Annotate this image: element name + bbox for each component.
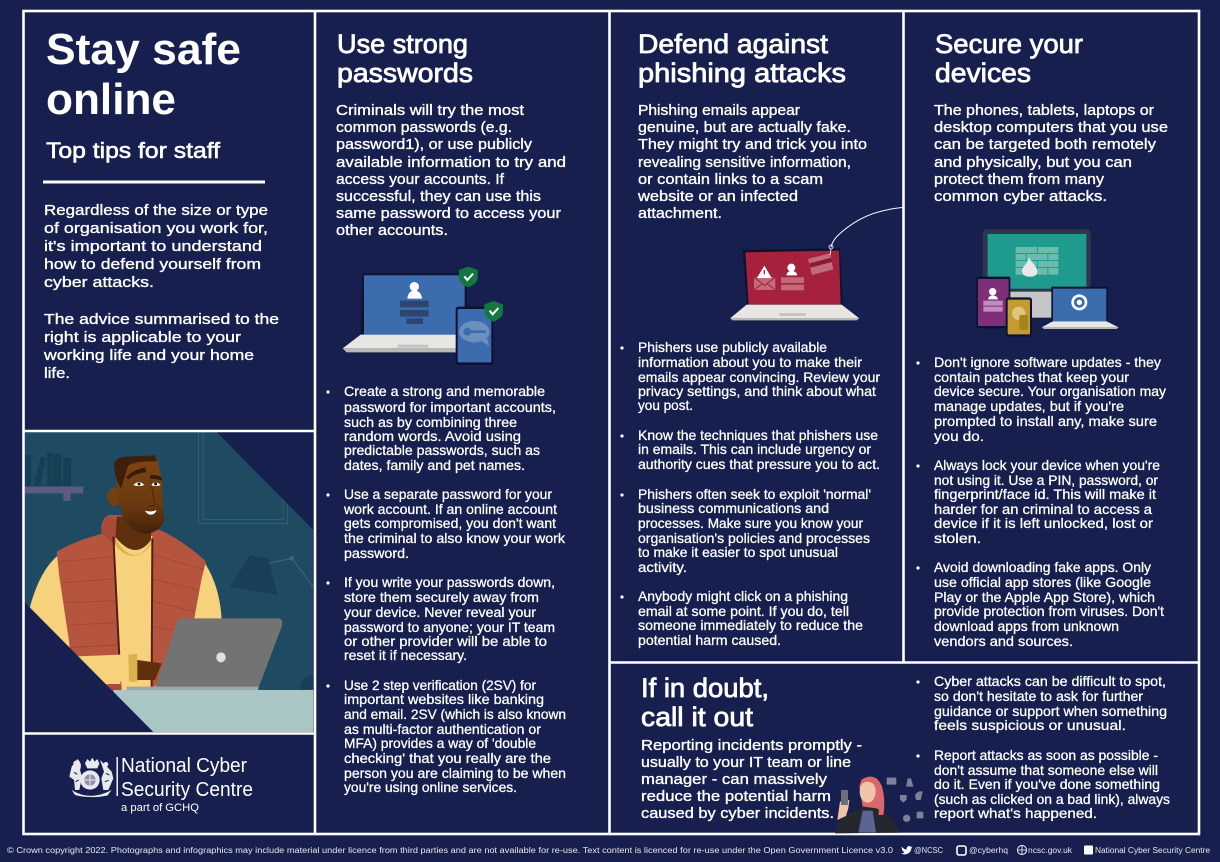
panel: secure your devices xyxy=(916,29,1168,649)
intro text: protect them from many xyxy=(934,171,1105,188)
bullet: tell someone immediately xyxy=(620,589,863,648)
bullet: lock your device: fingerprint/face id. This will make it xyxy=(934,487,1156,502)
bullet: writing passwords down: store them securely away from xyxy=(344,590,539,605)
intro text: website or an infected xyxy=(637,188,798,205)
bullet: public information: you post. xyxy=(638,398,693,413)
bullet list: phishing tips xyxy=(620,340,880,648)
bullet: tell someone immediately: potential harm caused. xyxy=(638,633,781,648)
bullet: writing passwords down: or other provider will be able to xyxy=(344,634,547,649)
bullet: normal business communications: organisation's policies and processes xyxy=(638,531,870,546)
title: Stay safe xyxy=(46,25,241,74)
bullet: writing passwords down xyxy=(326,575,555,663)
bullet: strong password: dates, family and pet names. xyxy=(344,458,525,473)
heading xyxy=(337,29,473,88)
bullet: normal business communications: to make it easier to spot unusual xyxy=(638,545,838,560)
bullet: strong password: Create a strong and memorable xyxy=(344,384,545,399)
reporting text: manager - can massively xyxy=(641,771,828,788)
bullet: writing passwords down: password to anyone; your IT team xyxy=(344,620,555,635)
bullet: lock your device: Always lock your device when you're xyxy=(934,458,1160,473)
website: ncsc.gov.uk xyxy=(1028,846,1073,855)
bullet: software updates: prompted to install any, make sure xyxy=(934,414,1157,429)
icon: woman holding phone with security icons xyxy=(835,777,923,833)
bullet: lock your device xyxy=(916,458,1160,546)
bullet: software updates: contain patches that keep your xyxy=(934,370,1129,385)
intro text xyxy=(934,102,1168,205)
heading xyxy=(641,673,769,732)
heading: Secure your xyxy=(935,29,1083,59)
intro text: or contain links to a scam xyxy=(638,171,823,188)
intro text: access your accounts. If xyxy=(336,171,505,188)
bullet: ask for guidance: Cyber attacks can be difficult to spot, xyxy=(934,674,1166,689)
bullet: two step verification: as multi-factor authentication or xyxy=(344,722,541,737)
heading: phishing attacks xyxy=(638,58,846,88)
logo: National Cyber Security Centre xyxy=(69,755,253,814)
bullet: public information: Phishers use publicly available xyxy=(638,340,827,355)
social: twitter xyxy=(901,846,943,855)
intro text: right is applicable to your xyxy=(44,329,241,346)
title xyxy=(46,25,241,124)
intro text: cyber attacks. xyxy=(44,274,154,291)
intro text: The advice summarised to the xyxy=(44,311,279,328)
intro text: working life and your home xyxy=(43,347,254,364)
intro text: can be targeted both remotely xyxy=(934,136,1157,153)
bullet: fake apps: download apps from unknown xyxy=(934,619,1119,634)
panel: if in doubt, call it out xyxy=(641,673,1170,833)
bullet: software updates xyxy=(916,355,1166,444)
bullet: ask for guidance: feels suspicious or unusual. xyxy=(934,718,1126,733)
bullet: software updates: device secure. Your organisation may xyxy=(934,384,1166,399)
intro text: attachment. xyxy=(638,205,722,222)
bullet: separate password: the criminal to also know your work xyxy=(344,531,565,546)
reporting text xyxy=(641,737,862,822)
copyright notice: © Crown copyright 2022. Photographs and infographics may include material under licence from third parties and are not available for re-use. Text content is licenced for re-use under the Open Government Licence v3.0 xyxy=(7,846,894,855)
title: online xyxy=(46,75,176,124)
heading: Use strong xyxy=(337,29,468,59)
bullet: report attacks: Report attacks as soon as possible - xyxy=(934,748,1158,763)
bullet: lock your device: stolen. xyxy=(934,531,981,546)
bullet: two step verification: important websites like banking xyxy=(344,692,544,707)
intro text xyxy=(43,202,279,382)
bullet: separate password: password. xyxy=(344,546,409,561)
footer xyxy=(7,846,1211,855)
bullet: writing passwords down: reset it if necessary. xyxy=(344,648,467,663)
panel: illustration of man at laptop xyxy=(25,432,313,732)
heading xyxy=(935,29,1083,88)
intro text: life. xyxy=(44,365,70,382)
bullet: strong password: predictable passwords, such as xyxy=(344,443,540,458)
logo wordmark: National Cyber xyxy=(121,755,247,777)
bullet: fake apps: vendors and sources. xyxy=(934,634,1073,649)
bullet: strong password xyxy=(326,384,556,473)
icon: royal crest xyxy=(69,758,113,797)
intro text: password1), or use publicly xyxy=(336,136,533,153)
bullet: strong password: random words. Avoid using xyxy=(344,429,521,444)
subtitle: Top tips for staff xyxy=(46,138,221,163)
icon: laptop and phone with shields xyxy=(343,267,503,365)
intro text: of organisation you work for, xyxy=(44,220,268,237)
heading: passwords xyxy=(337,58,473,88)
bullet: tell someone immediately: Anybody might click on a phishing xyxy=(638,589,848,604)
heading: If in doubt, xyxy=(641,673,769,703)
bullet: report attacks: report what's happened. xyxy=(934,806,1097,821)
bullet: fake apps: Avoid downloading fake apps. Only xyxy=(934,560,1151,575)
intro text: it's important to understand xyxy=(44,238,262,255)
bullet: fake apps: use official app stores (like Google xyxy=(934,575,1151,590)
bullet list: device tips xyxy=(916,355,1166,649)
intro text: They might try and trick you into xyxy=(638,136,867,153)
bullet: public information: emails appear convincing. Review your xyxy=(638,370,880,385)
bullet: strong password: password for important accounts, xyxy=(344,400,556,415)
bullet: report attacks: don't assume that someone else will xyxy=(934,763,1158,778)
title rule xyxy=(43,180,265,184)
intro text xyxy=(637,102,867,222)
intro text: available information to try and xyxy=(336,154,566,171)
intro text xyxy=(336,102,566,239)
bullet: separate password xyxy=(326,487,565,561)
bullet: public information xyxy=(620,340,880,413)
bullet: fake apps: Play or the Apple App Store), which xyxy=(934,590,1155,605)
intro text: common cyber attacks. xyxy=(934,188,1107,205)
bullet: phishing techniques: Know the techniques that phishers use xyxy=(638,428,878,443)
reporting text: Reporting incidents promptly - xyxy=(641,737,862,754)
logo divider xyxy=(116,757,118,796)
intro text: Regardless of the size or type xyxy=(44,202,268,219)
intro text: common passwords (e.g. xyxy=(336,119,512,136)
panel: defend against phishing attacks xyxy=(620,29,903,648)
intro text: and physically, but you can xyxy=(934,154,1132,171)
intro text: Phishing emails appear xyxy=(638,102,800,119)
bullet: normal business communications: processes. Make sure you know your xyxy=(638,516,863,531)
bullet: strong password: such as by combining three xyxy=(344,415,517,430)
bullet: software updates: you do. xyxy=(934,429,984,444)
bullet: phishing techniques: authority cues that pressure you to act. xyxy=(638,457,880,472)
intro text: The phones, tablets, laptops or xyxy=(934,102,1154,119)
reporting text: usually to your IT team or line xyxy=(641,754,851,771)
bullet: fake apps: provide protection from viruses. Don't xyxy=(934,604,1164,619)
logo wordmark: Security Centre xyxy=(121,779,253,801)
bullet: phishing techniques: in emails. This can include urgency or xyxy=(638,442,871,457)
bullet: software updates: manage updates, but if you're xyxy=(934,399,1124,414)
bullet: two step verification: Use 2 step verification (2SV) for xyxy=(344,678,536,693)
intro text: other accounts. xyxy=(336,222,448,239)
heading: Defend against xyxy=(638,29,829,59)
social: twitter: @NCSC xyxy=(914,846,943,855)
bullet: separate password: work account. If an online account xyxy=(343,502,557,517)
bullet: two step verification: MFA) provides a way of 'double xyxy=(344,736,536,751)
intro text: how to defend yourself from xyxy=(44,256,261,273)
bullet: report attacks: (such as clicked on a bad link), always xyxy=(934,792,1170,807)
intro text: revealing sensitive information, xyxy=(638,154,851,171)
bullet: normal business communications xyxy=(620,487,871,575)
bullet: tell someone immediately: email at some point. If you do, tell xyxy=(638,604,849,619)
bullet: ask for guidance: so don't hesitate to ask for further xyxy=(934,689,1143,704)
bullet: lock your device: device if it is left unlocked, lost or xyxy=(934,516,1153,531)
panel: use strong passwords xyxy=(326,29,566,795)
bullet: lock your device: harder for an criminal to access a xyxy=(934,502,1152,517)
bullet: two step verification: person you are claiming to be when xyxy=(344,766,566,781)
bullet: tell someone immediately: someone immediately to reduce the xyxy=(638,618,863,633)
icon: laptop with phishing hook xyxy=(730,207,903,320)
intro text: genuine, but are actually fake. xyxy=(638,119,851,136)
bullet: normal business communications: activity. xyxy=(638,560,687,575)
bullet: normal business communications: business communications and xyxy=(638,501,829,516)
reporting text: caused by cyber incidents. xyxy=(641,805,834,822)
bullet: normal business communications: Phishers often seek to exploit 'normal' xyxy=(638,487,871,502)
bullet: two step verification: checking' that you really are the xyxy=(344,751,551,766)
panel: stay safe online introduction xyxy=(43,25,279,382)
heading: devices xyxy=(935,58,1031,88)
icon: desktop, tablet, phone and laptop xyxy=(976,229,1119,337)
bullet list: reporting tips xyxy=(916,674,1170,821)
bullet: two step verification xyxy=(326,678,566,795)
social: linkedin: National Cyber Security Centre xyxy=(1095,846,1211,855)
bullet: two step verification: and email. 2SV (which is also known xyxy=(344,707,566,722)
bullet: public information: information about you to make their xyxy=(638,355,862,370)
bullet: report attacks: do it. Even if you've done something xyxy=(934,777,1160,792)
logo wordmark: a part of GCHQ xyxy=(121,802,199,814)
heading: call it out xyxy=(641,702,754,732)
intro text: Criminals will try the most xyxy=(336,102,525,119)
intro text: successful, they can use this xyxy=(336,188,541,205)
social: instagram: @cyberhq xyxy=(969,846,1008,855)
bullet: report attacks xyxy=(916,748,1170,821)
bullet: two step verification: you're using online services. xyxy=(344,780,517,795)
bullet: separate password: gets compromised, you don't want xyxy=(344,516,556,531)
bullet: ask for guidance xyxy=(916,674,1167,733)
intro text: same password to access your xyxy=(336,205,561,222)
bullet: separate password: Use a separate password for your xyxy=(344,487,552,502)
reporting text: reduce the potential harm xyxy=(641,788,831,805)
bullet: writing passwords down: If you write your passwords down, xyxy=(344,575,555,590)
intro text: desktop computers that you use xyxy=(934,119,1168,136)
bullet: lock your device: not using it. Use a PIN, password, or xyxy=(934,473,1158,488)
bullet: software updates: Don't ignore software updates - they xyxy=(934,355,1161,370)
heading xyxy=(638,29,846,88)
logo wordmark xyxy=(121,755,253,814)
bullet: ask for guidance: guidance or support when something xyxy=(934,704,1167,719)
bullet: writing passwords down: your device. Never reveal your xyxy=(344,605,536,620)
bullet list: password tips xyxy=(326,384,566,795)
bullet: public information: privacy settings, and think about what xyxy=(638,384,876,399)
bullet: phishing techniques xyxy=(620,428,880,472)
bullet: fake apps xyxy=(916,560,1164,649)
